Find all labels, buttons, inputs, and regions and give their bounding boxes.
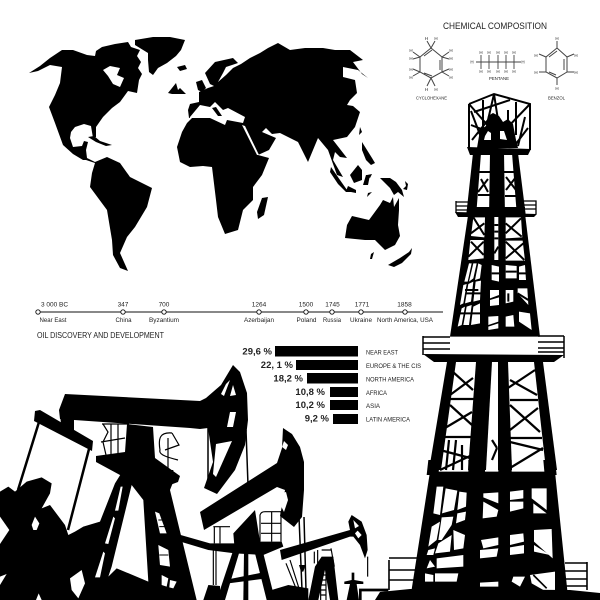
timeline: Azerbaijan [244, 317, 274, 324]
heading: oil discovery and development: OIL DISCOVERY AND DEVELOPMENT [37, 330, 164, 340]
derrick: cross bracing [440, 370, 543, 470]
molecule: pentane: PENTANE [489, 76, 509, 81]
pump jack: large left [18, 365, 248, 530]
bar chart: oil by region: EUROPE & THE CIS [366, 363, 422, 370]
bar chart: oil by region: 18,2 % [273, 374, 304, 384]
molecule: cyclohexane: H [449, 56, 453, 61]
derrick: lower legs [429, 362, 557, 470]
molecule: pentane: H [521, 60, 525, 64]
derrick: lower tower section with windows [410, 460, 568, 600]
molecule: cyclohexane: H [409, 75, 413, 80]
molecule: pentane: H [512, 50, 516, 55]
molecule: pentane: H [512, 69, 516, 74]
molecule: pentane [470, 50, 525, 81]
derrick: mid tower section with windows [450, 213, 540, 337]
timeline: Near East [40, 317, 67, 324]
molecule: cyclohexane: H [434, 36, 438, 41]
derrick: upper tower section [466, 153, 526, 217]
bar chart: oil by region: 10,2 % [295, 400, 326, 411]
molecule: cyclohexane: H [434, 87, 438, 92]
chemical composition [409, 21, 578, 100]
molecule: pentane: H [504, 50, 508, 55]
timeline [36, 302, 443, 324]
molecule: cyclohexane: H [449, 48, 453, 53]
world map [29, 37, 412, 271]
molecule: benzol: BENZOL [548, 96, 565, 100]
molecule: pentane: H [496, 50, 500, 55]
bar chart: oil by region [242, 346, 422, 424]
timeline: 3 000 BC [41, 302, 68, 308]
molecule: benzol: H [534, 53, 538, 58]
molecule: cyclohexane: H [425, 87, 428, 92]
bar chart: oil by region: AFRICA [366, 390, 388, 397]
molecule: benzol: H [534, 70, 538, 75]
oil derrick [375, 94, 600, 600]
molecule: benzol: H [574, 53, 578, 58]
molecule: benzol [534, 36, 578, 100]
molecule: cyclohexane: H [409, 67, 413, 72]
molecule: pentane: H [470, 60, 474, 64]
timeline: 1264 [252, 302, 267, 308]
timeline: Ukraine [350, 317, 372, 324]
timeline: North America, USA [377, 317, 434, 324]
timeline: Russia [323, 317, 341, 324]
molecule: cyclohexane: H [409, 48, 413, 53]
derrick: middle platform railing [423, 336, 564, 358]
timeline: 347 [118, 302, 129, 308]
molecule: pentane: H [487, 50, 491, 55]
derrick: upper platform railing [456, 201, 536, 214]
timeline: 1858 [397, 302, 412, 308]
bar chart: oil by region: NEAR EAST [366, 350, 398, 356]
molecule: pentane: H [479, 69, 483, 74]
pump jack: middle [175, 428, 306, 600]
timeline: 700 [159, 302, 170, 308]
bar chart: oil by region: 9,2 % [305, 414, 330, 424]
molecule: cyclohexane: H [425, 36, 428, 41]
molecule: benzol: H [574, 70, 578, 75]
molecule: pentane: H [496, 69, 500, 74]
derrick: bottom platform railing [389, 558, 587, 590]
derrick: crown [467, 94, 531, 155]
bar chart: oil by region: NORTH AMERICA [366, 376, 415, 384]
counterweight and pump frame foreground [0, 470, 197, 600]
molecule: cyclohexane: H [449, 75, 453, 80]
molecule: benzol: H [555, 36, 559, 41]
molecule: cyclohexane: CYCLOHEXANE [416, 96, 447, 100]
bar chart: oil by region: LATIN AMERICA [366, 416, 411, 424]
molecule: cyclohexane: H [449, 67, 453, 72]
timeline: Byzantium [149, 317, 179, 324]
timeline: Poland [296, 317, 317, 324]
molecule: pentane: H [487, 69, 491, 74]
molecule: pentane: H [479, 50, 483, 55]
heading: chemical composition: CHEMICAL COMPOSITION [443, 21, 547, 32]
timeline: 1500 [299, 302, 314, 308]
bar chart: oil by region: 22, 1 % [261, 360, 294, 371]
bar chart: oil by region: 29,6 % [242, 346, 273, 358]
molecule: benzol: H [555, 86, 559, 91]
timeline: China [116, 317, 132, 324]
timeline: 1745 [325, 302, 340, 308]
derrick: ground base [375, 589, 600, 600]
timeline: 1771 [355, 302, 370, 308]
molecule: cyclohexane: H [409, 56, 413, 61]
pump jack: small far right [268, 515, 388, 600]
bar chart: oil by region: ASIA [366, 403, 381, 410]
bar chart: oil by region: 10,8 % [295, 387, 326, 398]
molecule: cyclohexane [409, 36, 453, 100]
molecule: pentane: H [504, 69, 508, 74]
